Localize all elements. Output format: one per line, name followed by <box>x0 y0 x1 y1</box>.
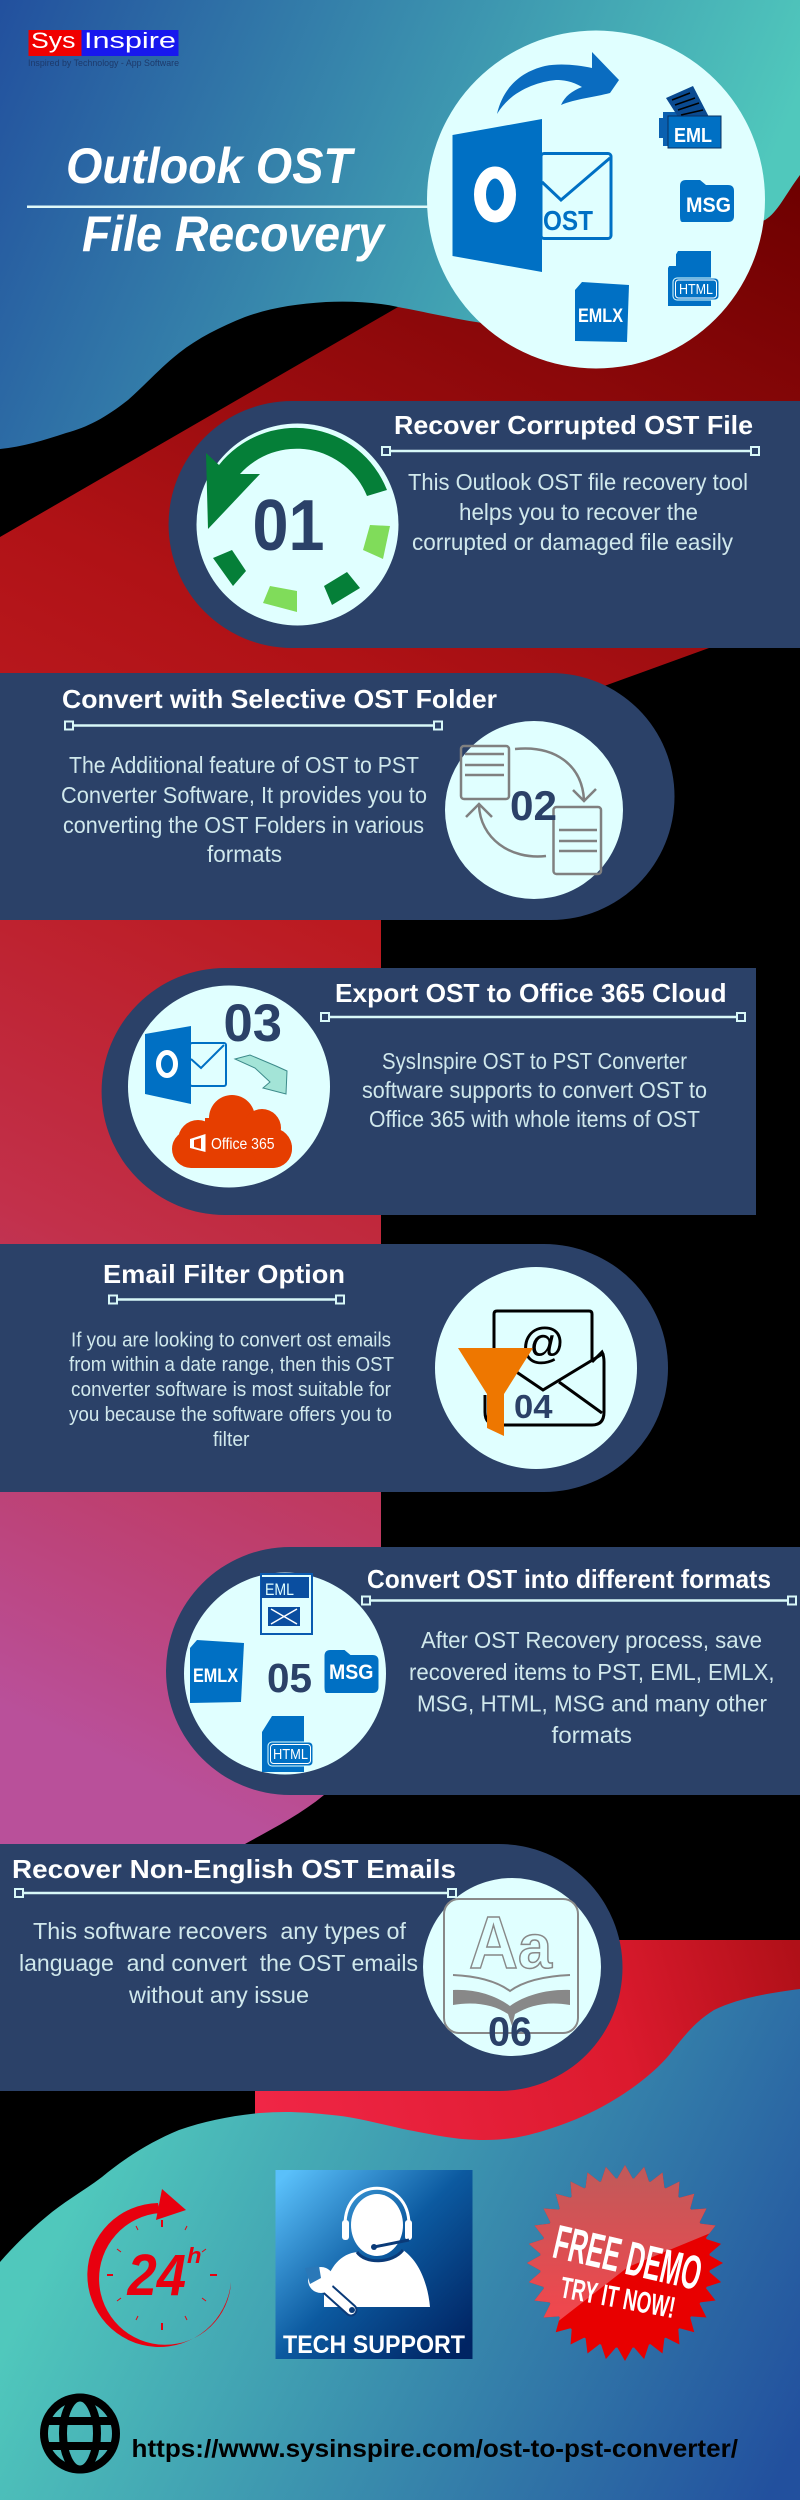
icon: free demo starburst <box>527 2165 723 2361</box>
text block: you because the software offers you to <box>69 1404 392 1426</box>
logo <box>28 28 179 69</box>
icon: Outlook to Office 365: Office 365 <box>211 1136 275 1153</box>
heading: Convert OST into different formats <box>367 1564 771 1594</box>
panel: step 1 <box>169 401 800 648</box>
icon: language book 06: a <box>518 1913 553 1982</box>
text block <box>408 469 748 555</box>
icon: recovery circle 01: 01 <box>252 486 324 566</box>
icon: free demo starburst: TRY IT NOW! <box>558 2271 678 2325</box>
heading: Email Filter Option <box>103 1259 345 1289</box>
icon: tech support badge <box>276 2170 472 2359</box>
website link: https://www.sysinspire.com/ost-to-pst-converter/ <box>132 2435 738 2463</box>
panel: step 5 <box>166 1547 800 1795</box>
icon: EML <box>659 86 721 148</box>
text block: without any issue <box>128 1982 309 2008</box>
icon: Outlook to Office 365 <box>128 986 330 1188</box>
icon: language book 06 <box>423 1878 601 2056</box>
text block <box>409 1627 774 1748</box>
title: Outlook OST <box>66 138 356 194</box>
heading: Recover Non-English OST Emails <box>12 1854 456 1884</box>
panel: step 3 <box>102 968 756 1215</box>
icon: document conversion 02: 02 <box>510 782 557 829</box>
heading: Convert with Selective OST Folder <box>62 684 497 714</box>
text block: language and convert the OST emails <box>19 1950 418 1976</box>
text block: corrupted or damaged file easily <box>412 529 733 555</box>
text block: This software recovers any types of <box>33 1918 407 1944</box>
text block: converting the OST Folders in various <box>63 812 424 838</box>
icon: EML document <box>261 1574 312 1634</box>
panel: step 2 <box>0 673 675 920</box>
icon: EML document: EML <box>265 1580 294 1599</box>
text block: helps you to recover the <box>459 499 698 525</box>
icon: HTML file: HTML <box>273 1746 308 1763</box>
text block: If you are looking to convert ost emails <box>71 1330 391 1352</box>
icon: MSG: MSG <box>686 194 731 217</box>
icon: 24 hour clock: h <box>187 2243 202 2268</box>
text block: This Outlook OST file recovery tool <box>408 469 748 495</box>
panel: step 4 <box>0 1244 668 1492</box>
text block: formats <box>552 1722 632 1748</box>
text block: formats <box>207 841 282 867</box>
text block: After OST Recovery process, save <box>421 1627 762 1653</box>
logo: Inspire <box>84 28 176 53</box>
hero circle with icons <box>427 30 765 368</box>
logo: Sys <box>31 28 76 53</box>
title <box>27 138 429 262</box>
icon: language book 06: A <box>469 1901 518 1984</box>
icon: EML: EML <box>674 125 712 147</box>
icon: globe <box>44 2398 116 2470</box>
icon: Outlook to Office 365: 03 <box>224 994 282 1053</box>
text block: Office 365 with whole items of OST <box>369 1106 700 1132</box>
background: bottom teal-blue wave <box>0 1989 800 2500</box>
heading: Export OST to Office 365 Cloud <box>335 978 726 1008</box>
text block: filter <box>213 1429 250 1451</box>
icon: HTML file <box>262 1716 313 1772</box>
text block: Converter Software, It provides you to <box>61 782 427 808</box>
icon: file formats 05 <box>184 1572 386 1774</box>
icon: MSG folder <box>324 1650 378 1693</box>
text block <box>69 1330 394 1451</box>
text block: converter software is most suitable for <box>71 1379 391 1401</box>
panel: step 6 <box>0 1844 622 2091</box>
icon: email filter 04: 04 <box>514 1388 553 1425</box>
icon: document conversion 02 <box>445 721 623 899</box>
icon: tech support badge: TECH SUPPORT <box>283 2331 465 2359</box>
background: bottom-right red wave <box>255 1940 800 2150</box>
heading: Recover Corrupted OST File <box>394 410 753 440</box>
text block: recovered items to PST, EML, EMLX, <box>409 1659 774 1685</box>
text block <box>61 752 427 867</box>
icon: Outlook OST <box>452 119 611 272</box>
icon: email filter 04: @ <box>521 1319 565 1368</box>
text block: SysInspire OST to PST Converter <box>382 1048 687 1074</box>
icon: file formats 05: 05 <box>267 1655 312 1701</box>
icon: EMLX file: EMLX <box>193 1666 238 1687</box>
icon: EMLX file <box>190 1640 244 1703</box>
icon: EMLX <box>575 282 629 342</box>
icon: MSG folder: MSG <box>329 1661 374 1684</box>
title: File Recovery <box>82 206 386 262</box>
icon: EMLX: EMLX <box>578 306 623 327</box>
text block: from within a date range, then this OST <box>69 1354 394 1376</box>
logo: Inspired by Technology - App Software <box>28 58 179 69</box>
icon: Outlook OST: OST <box>543 205 593 236</box>
icon: language book 06: 06 <box>488 2008 532 2054</box>
text block: The Additional feature of OST to PST <box>69 752 419 778</box>
icon: 24 hour clock <box>87 2189 231 2347</box>
icon: 24 hour clock: 24 <box>127 2243 186 2308</box>
icon: MSG <box>680 180 734 222</box>
icon: HTML <box>668 251 719 306</box>
text block <box>362 1048 707 1132</box>
background: red ribbon <box>0 100 800 1844</box>
icon: curved arrow <box>497 52 619 114</box>
text block: MSG, HTML, MSG and many other <box>417 1690 767 1716</box>
icon: recovery circle 01 <box>196 424 398 626</box>
background: top teal-blue wave <box>0 0 800 449</box>
icon: HTML: HTML <box>679 281 713 298</box>
text block <box>19 1918 418 2008</box>
text block: software supports to convert OST to <box>362 1077 707 1103</box>
icon: email filter 04 <box>435 1267 637 1469</box>
